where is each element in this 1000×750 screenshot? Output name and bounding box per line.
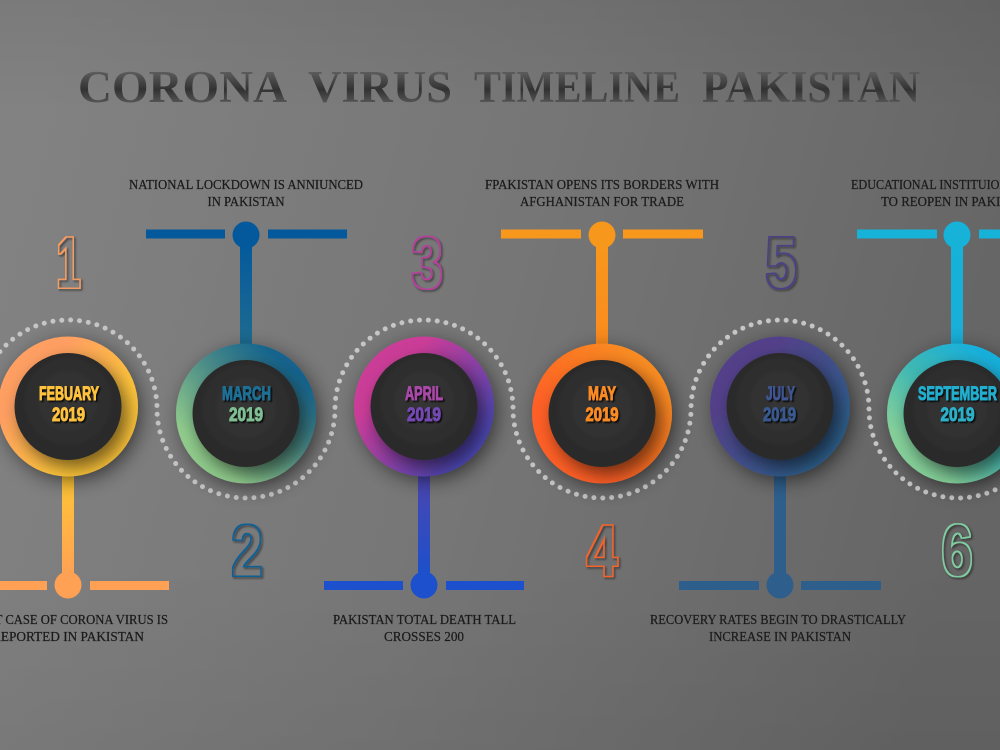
text: death toll: CROSSES 200 xyxy=(384,630,464,645)
dark disc: September xyxy=(904,360,1000,467)
month: May: MAY xyxy=(588,383,616,405)
step 5: July xyxy=(650,224,906,645)
text: borders: FPAKISTAN OPENS ITS BORDERS WITH xyxy=(485,178,719,193)
text: borders xyxy=(485,178,719,210)
text: death toll xyxy=(333,613,516,645)
step 6: September xyxy=(851,178,1000,592)
year: September: 2019 xyxy=(940,404,975,426)
text: national lockdown: IN PAKISTAN xyxy=(208,195,284,210)
title: CORONA xyxy=(78,62,288,112)
number 5: 5 xyxy=(766,224,796,304)
text: recovery: RECOVERY RATES BEGIN TO DRASTICALLY xyxy=(650,613,906,628)
ring: September xyxy=(887,344,1000,484)
year: March: 2019 xyxy=(229,404,263,426)
connector: February xyxy=(0,470,169,598)
connector: April xyxy=(324,470,524,598)
text: death toll: PAKISTAN TOTAL DEATH TALL xyxy=(333,613,516,628)
month: April: APRIL xyxy=(405,383,443,405)
text: recovery: INCREASE IN PAKISTAN xyxy=(709,630,851,645)
year: July: 2019 xyxy=(763,404,796,426)
month: February: FEBUARY xyxy=(39,383,99,405)
text: national lockdown: NATIONAL LOCKDOWN IS ANNIUNCED xyxy=(129,178,363,193)
ring: May xyxy=(532,344,672,484)
year: May: 2019 xyxy=(586,404,619,426)
title xyxy=(78,62,920,112)
text: first case xyxy=(0,613,168,645)
text: recovery xyxy=(650,613,906,645)
year: February: 2019 xyxy=(52,404,85,426)
number 3: 3 xyxy=(412,224,442,304)
title: VIRUS xyxy=(308,62,452,112)
number 2: 2 xyxy=(232,512,262,592)
number 1: 1 xyxy=(56,224,80,304)
dark disc: February xyxy=(14,353,122,460)
ring: April xyxy=(354,336,494,476)
connector: May xyxy=(501,222,703,348)
number 6: 6 xyxy=(942,512,972,592)
dark disc: March xyxy=(192,360,300,467)
month: July: JULY xyxy=(766,383,795,405)
connector: March xyxy=(146,222,347,348)
step 4: May xyxy=(485,178,719,592)
text: education xyxy=(851,178,1000,210)
step 2: March xyxy=(129,178,363,592)
text: national lockdown xyxy=(129,178,363,210)
step 3: April xyxy=(324,224,524,645)
ring: February xyxy=(0,336,138,476)
number 4: 4 xyxy=(586,512,618,592)
dark disc: May xyxy=(548,360,656,467)
text: borders: AFGHANISTAN FOR TRADE xyxy=(520,195,684,210)
dotted wave connector xyxy=(0,320,1000,498)
step 1: February xyxy=(0,224,169,645)
connector: July xyxy=(679,470,881,598)
month: March: MARCH xyxy=(222,383,271,405)
dark disc: July xyxy=(726,353,834,460)
title: PAKISTAN xyxy=(702,62,920,112)
dark disc: April xyxy=(370,353,478,460)
ring: March xyxy=(176,344,316,484)
year: April: 2019 xyxy=(407,404,441,426)
ring: July xyxy=(710,336,850,476)
connector: September xyxy=(857,222,1000,348)
title: TIMELINE xyxy=(474,62,680,112)
